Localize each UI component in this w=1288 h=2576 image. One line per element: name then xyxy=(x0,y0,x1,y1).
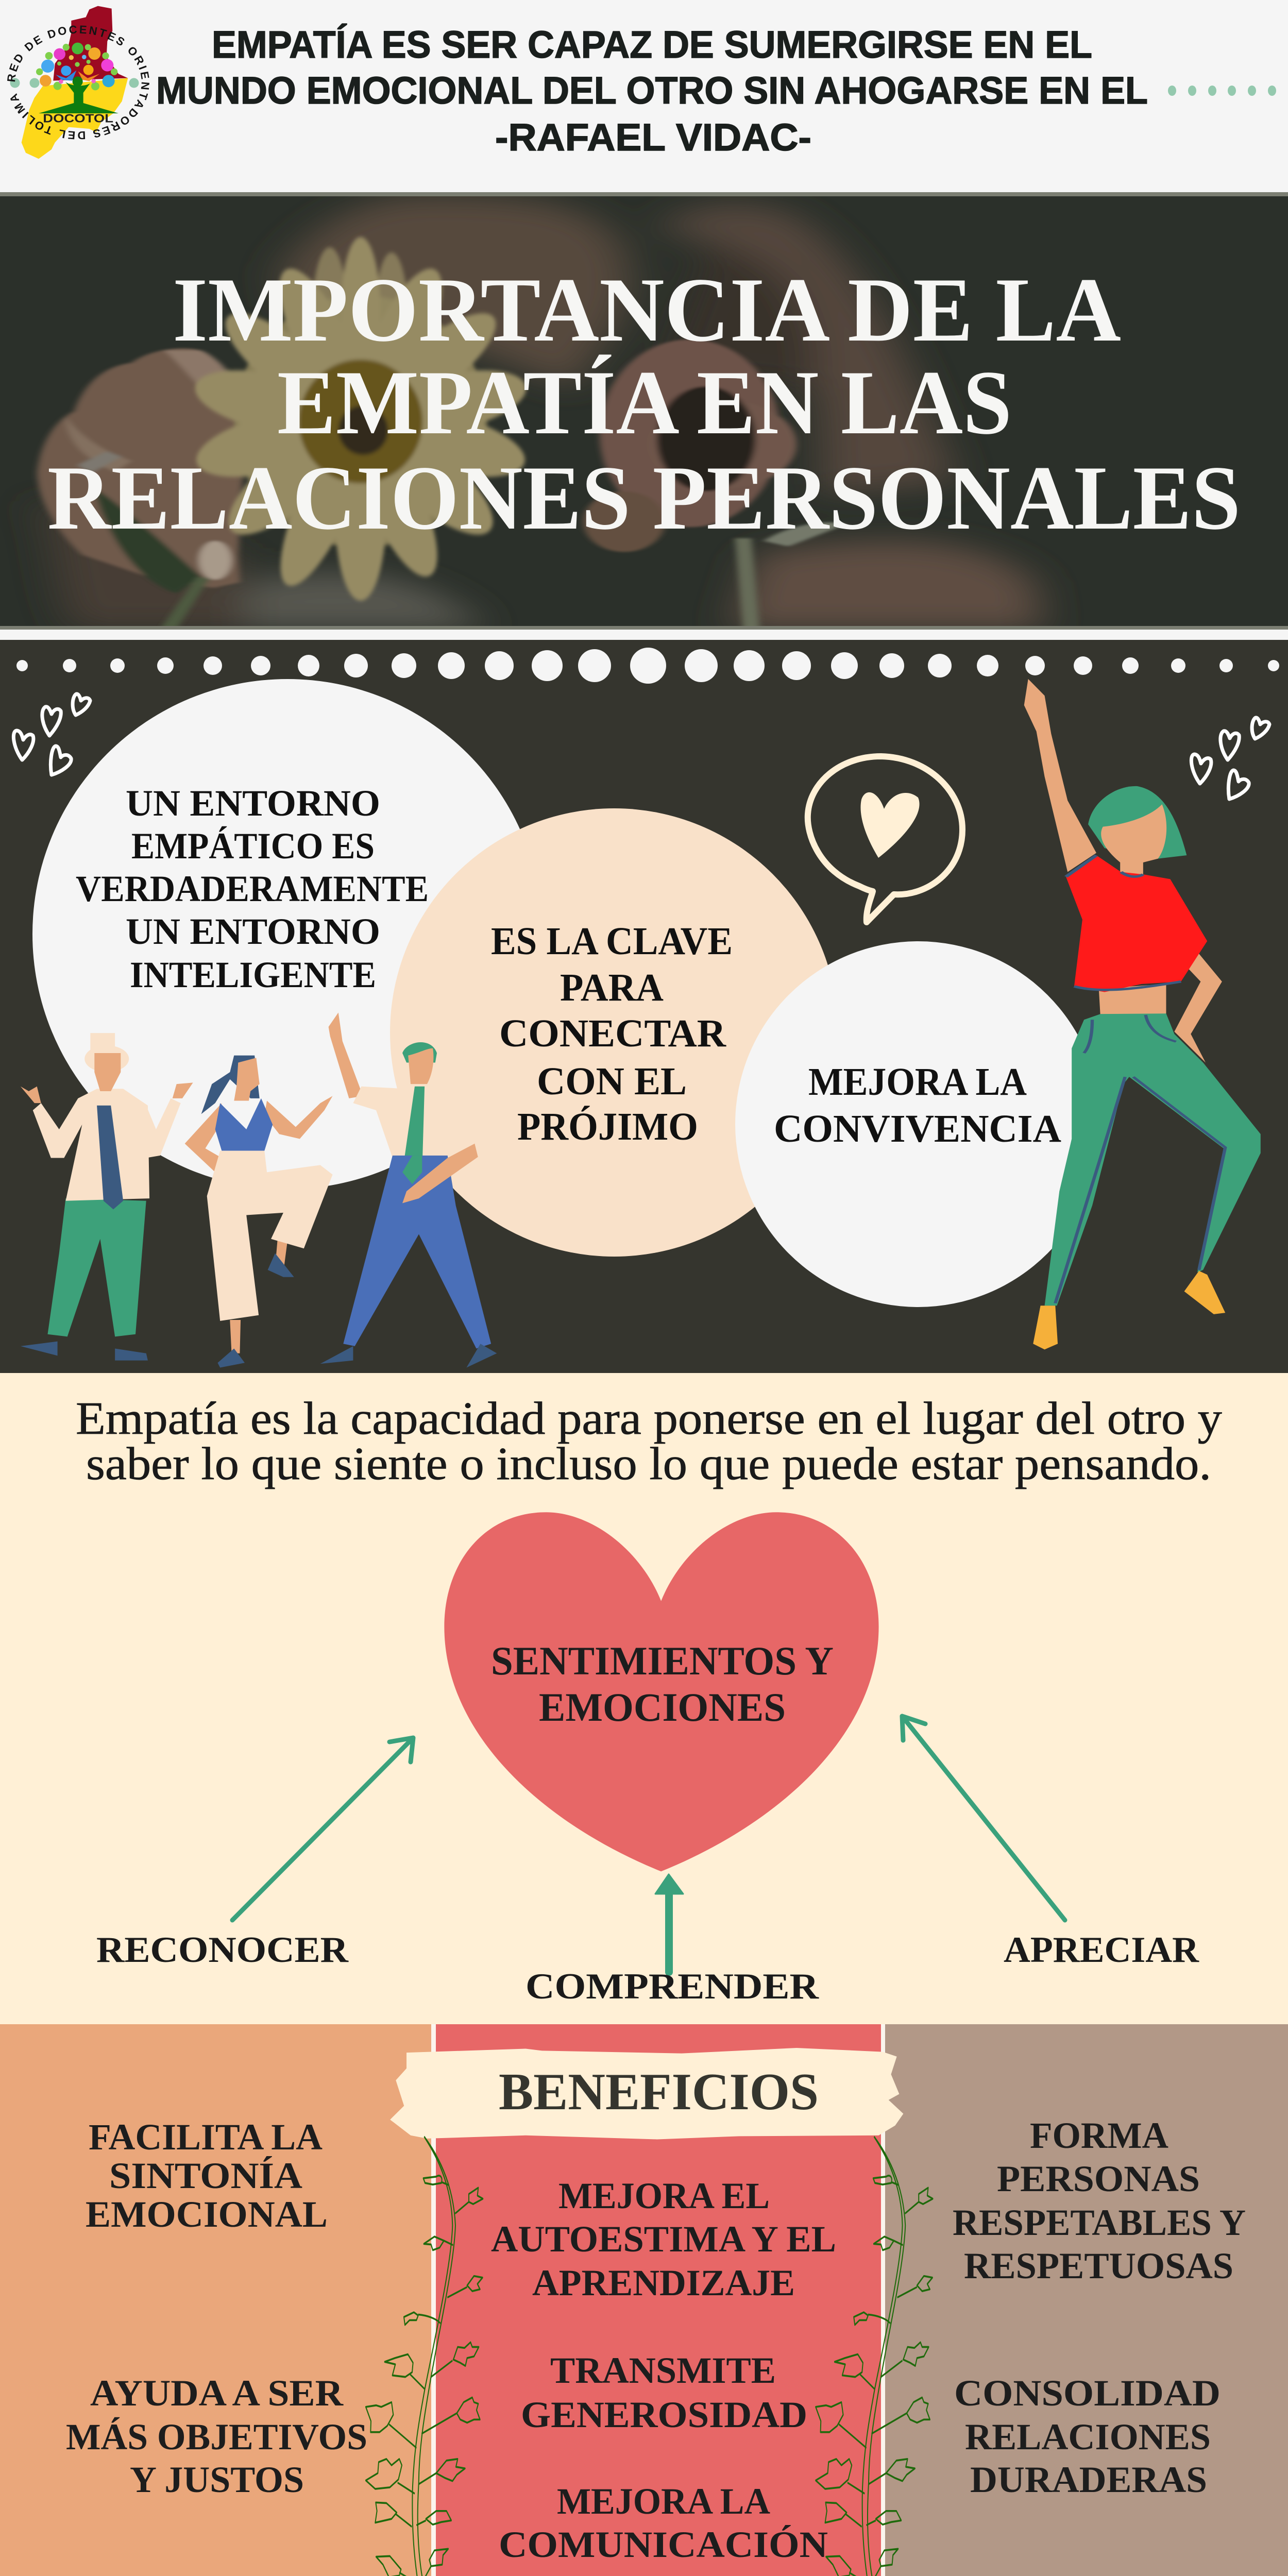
labels: arrows: RECONOCER xyxy=(96,1930,349,1970)
arrow: apreciar xyxy=(902,1716,1065,1920)
circle 1: entorno inteligente: EMPÁTICO ES xyxy=(131,825,375,867)
benefits left column: FACILITA LA xyxy=(89,2116,323,2158)
benefits right column: RESPETABLES Y xyxy=(953,2202,1246,2243)
panel: header quote xyxy=(7,6,1276,159)
benefits middle column: MEJORA EL xyxy=(558,2175,770,2216)
benefits middle column: GENEROSIDAD xyxy=(521,2394,807,2435)
quote text: EMPATÍA ES SER CAPAZ DE SUMERGIRSE EN EL xyxy=(212,23,1092,66)
panel: definition section xyxy=(0,1373,1288,2024)
woman in blue top xyxy=(185,1056,333,1367)
panel: dark section with circles xyxy=(0,640,1288,1373)
definition text: Empatía es la capacidad para ponerse en el lugar del otro y xyxy=(76,1393,1222,1444)
benefits left column xyxy=(66,2116,367,2500)
man with hat xyxy=(21,1033,193,1361)
logo: DOCOTOL: RED DE DOCENTES ORIENTADORES DEL TOLIMA xyxy=(7,26,149,139)
benefits right column: CONSOLIDAD xyxy=(954,2372,1221,2414)
labels: arrows: COMPRENDER xyxy=(526,1967,819,2007)
circle 1: entorno inteligente: UN ENTORNO xyxy=(126,911,380,952)
heart text: EMOCIONES xyxy=(539,1685,786,1730)
labels: arrows xyxy=(96,1930,1199,2007)
benefits right column xyxy=(953,2115,1246,2500)
icon: small hearts right xyxy=(1191,718,1269,799)
benefits middle column: APRENDIZAJE xyxy=(532,2262,795,2303)
benefits left column: EMOCIONAL xyxy=(86,2194,328,2235)
quote text: MUNDO EMOCIONAL DEL OTRO SIN AHOGARSE EN EL xyxy=(156,69,1148,112)
panel: benefits xyxy=(0,2024,1288,2576)
benefits right column: DURADERAS xyxy=(970,2459,1207,2500)
benefits middle column: COMUNICACIÓN xyxy=(499,2524,828,2565)
dotted line xyxy=(10,78,1276,96)
man with green tie xyxy=(320,1012,497,1367)
heart text: SENTIMIENTOS Y xyxy=(491,1638,834,1683)
panel: title banner with photo xyxy=(0,192,1288,640)
quote text: -RAFAEL VIDAC- xyxy=(495,116,811,159)
benefits right column: RELACIONES xyxy=(965,2416,1211,2458)
main title xyxy=(47,259,1241,549)
circle 3: mejora la convivencia: MEJORA LA xyxy=(808,1060,1027,1104)
benefits left column: Y JUSTOS xyxy=(130,2459,304,2500)
illustration: dancing woman xyxy=(1024,679,1261,1349)
pink flower xyxy=(583,340,846,630)
banner: beneficios: BENEFICIOS xyxy=(499,2063,819,2121)
circle 2: clave para conectar: PRÓJIMO xyxy=(517,1105,698,1148)
arrow: reconocer xyxy=(232,1738,413,1920)
benefits left column: MÁS OBJETIVOS xyxy=(66,2416,367,2458)
hand xyxy=(37,348,245,630)
benefits middle column: AUTOESTIMA Y EL xyxy=(491,2218,836,2260)
circle 2: clave para conectar xyxy=(390,808,838,1257)
benefits left column: AYUDA A SER xyxy=(90,2372,344,2414)
icon: speech bubble with heart xyxy=(808,756,962,922)
circle 2: clave para conectar: CONECTAR xyxy=(499,1012,726,1055)
benefits middle column: MEJORA LA xyxy=(557,2481,770,2522)
benefits middle column xyxy=(491,2175,836,2565)
definition text: saber lo que siente o incluso lo que puede estar pensando. xyxy=(86,1438,1211,1489)
sunflower xyxy=(190,237,532,601)
vines xyxy=(366,2137,933,2576)
main title: RELACIONES PERSONALES xyxy=(47,447,1241,549)
circle 1: entorno inteligente: INTELIGENTE xyxy=(130,954,376,995)
main title: IMPORTANCIA DE LA xyxy=(173,259,1121,361)
banner: beneficios xyxy=(390,2048,903,2139)
main title: EMPATÍA EN LAS xyxy=(277,351,1012,453)
logo: DOCOTOL: DOCOTOL xyxy=(43,111,113,125)
arrow: comprender xyxy=(655,1874,683,1976)
icon: small hearts left xyxy=(13,694,90,775)
benefits right column: RESPETUOSAS xyxy=(964,2245,1233,2286)
definition text xyxy=(76,1393,1222,1489)
benefits right column: PERSONAS xyxy=(997,2158,1200,2199)
benefits middle column: TRANSMITE xyxy=(550,2350,776,2391)
labels: arrows: APRECIAR xyxy=(1004,1930,1199,1970)
circle 1: entorno inteligente: VERDADERAMENTE xyxy=(76,868,429,909)
background photo of sunflowers xyxy=(33,196,1043,630)
heart xyxy=(444,1512,879,1871)
circle 1: entorno inteligente xyxy=(32,679,543,1189)
benefits left column: SINTONÍA xyxy=(109,2155,302,2196)
row of dots xyxy=(16,648,1279,684)
circle 2: clave para conectar: CON EL xyxy=(537,1060,687,1103)
circle 2: clave para conectar: PARA xyxy=(560,966,664,1009)
heart text xyxy=(491,1638,834,1730)
circle 1: entorno inteligente: UN ENTORNO xyxy=(126,783,380,824)
illustration: three people dancing xyxy=(21,1012,497,1367)
quote text xyxy=(156,23,1148,159)
benefits right column: FORMA xyxy=(1030,2115,1168,2156)
circle 2: clave para conectar: ES LA CLAVE xyxy=(491,920,733,963)
circle 3: mejora la convivencia: CONVIVENCIA xyxy=(774,1107,1061,1150)
circle 3: mejora la convivencia xyxy=(735,941,1101,1307)
